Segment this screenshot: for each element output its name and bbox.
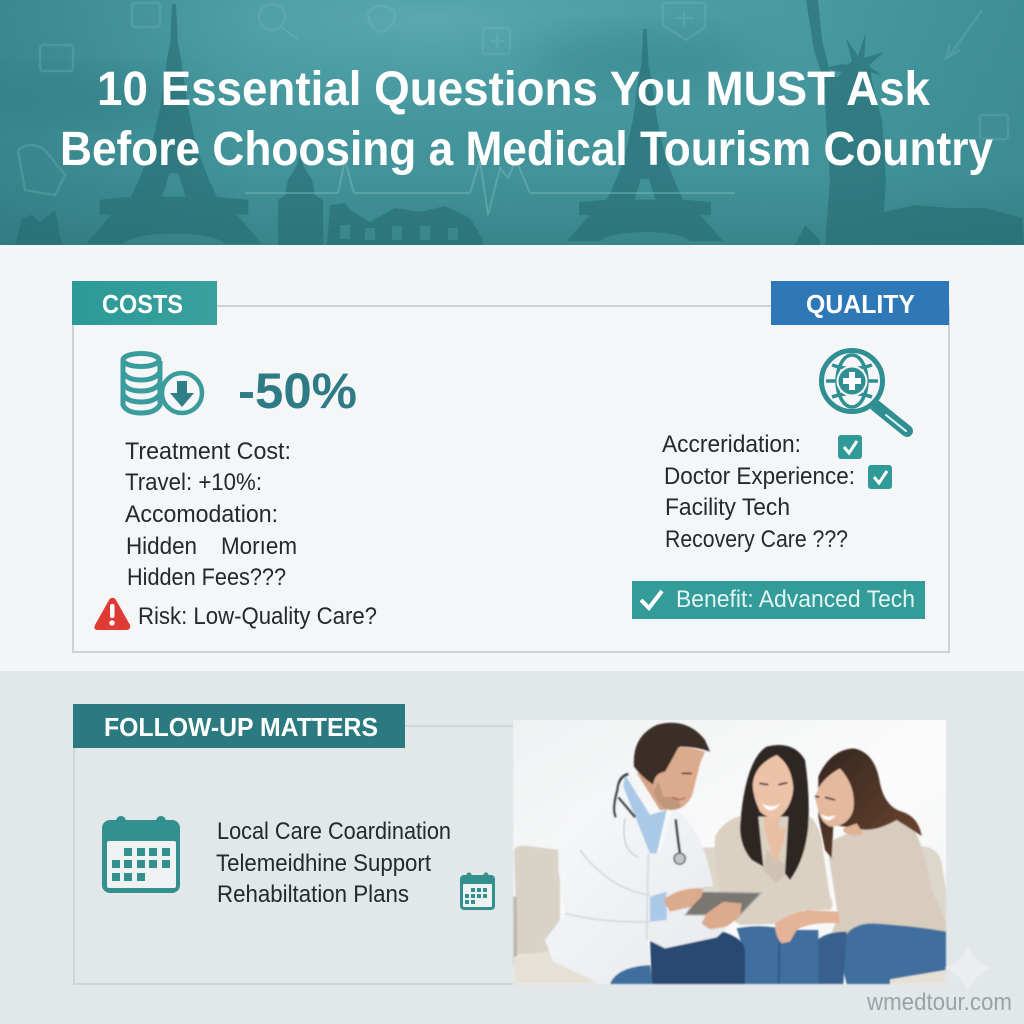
quality list: Facility Tech	[665, 494, 790, 521]
watermark: wmedtour.com	[866, 989, 1012, 1016]
stat: -50%: -50%	[238, 363, 357, 419]
costs list: Hidden Fees???	[127, 564, 286, 591]
hands	[775, 910, 840, 943]
benefit banner: Benefit: Advanced Tech	[676, 586, 915, 613]
icon: watermark sparkle	[944, 944, 992, 992]
header banner	[0, 0, 1024, 245]
quality list: Accreridation:	[662, 431, 801, 458]
costs list: Travel: +10%:	[125, 469, 262, 496]
costs tab	[72, 281, 217, 325]
quality list	[662, 431, 855, 553]
follow-up tab: FOLLOW-UP MATTERS	[104, 712, 378, 742]
panel: costs content	[94, 354, 377, 630]
costs list: Hidden	[126, 533, 197, 560]
title: 10 Essential Questions You MUST Ask	[97, 63, 930, 116]
costs tab: COSTS	[102, 289, 183, 319]
panel: costs and quality frame	[73, 306, 949, 652]
stethoscope	[614, 774, 680, 853]
icon: checkbox accreditation	[838, 435, 862, 459]
page background: upper section	[0, 245, 1024, 671]
page background: lower section	[0, 671, 1024, 1024]
follow-up list	[216, 818, 451, 908]
icon: checkbox doctor experience	[868, 465, 892, 489]
panel: quality content	[632, 350, 925, 619]
follow-up list: Local Care Coardination	[217, 818, 451, 845]
icon: small calendar	[460, 872, 495, 910]
follow-up tab	[73, 704, 405, 748]
faint medical icons	[18, 3, 1008, 195]
sofa	[513, 846, 946, 984]
quality list: Doctor Experience:	[664, 463, 855, 490]
skyline silhouettes	[15, 0, 1024, 245]
heartbeat line	[245, 160, 735, 215]
risk warning: Risk: Low-Quality Care?	[138, 603, 377, 630]
icon: magnifier with globe	[822, 350, 907, 431]
woman 1	[715, 745, 832, 984]
woman 2	[814, 748, 946, 984]
icon: coins with down arrow	[123, 354, 202, 413]
panel: follow-up frame	[74, 726, 513, 984]
risk warning	[94, 598, 377, 630]
costs list	[125, 438, 297, 591]
costs list: Accomodation:	[125, 501, 278, 528]
follow-up list: Telemeidhine Support	[216, 850, 431, 877]
costs list: Morıem	[221, 533, 297, 560]
tablet	[685, 892, 762, 915]
costs list: Treatment Cost:	[125, 438, 291, 465]
photo: doctor with two patients on a sofa	[513, 720, 946, 984]
quality list: Recovery Care ???	[665, 526, 848, 553]
quality tab	[771, 281, 949, 325]
icon: large calendar	[102, 816, 180, 893]
doctor	[545, 723, 762, 984]
title	[60, 63, 993, 176]
follow-up list: Rehabiltation Plans	[217, 881, 409, 908]
quality tab: QUALITY	[806, 289, 915, 319]
benefit banner	[632, 581, 925, 619]
